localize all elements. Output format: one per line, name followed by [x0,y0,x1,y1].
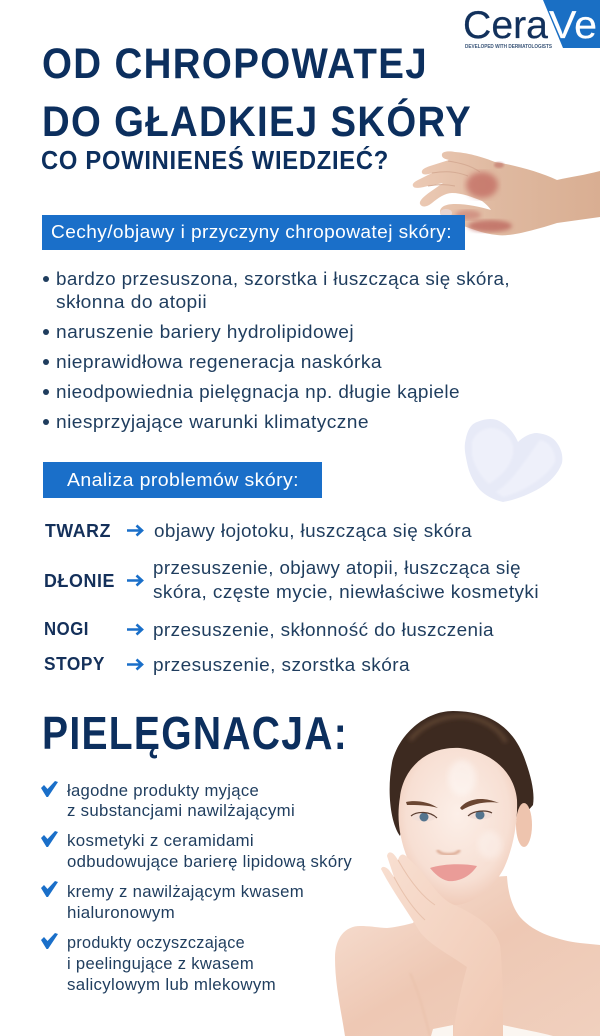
panel: skin analysis heading bar [43,462,322,498]
list: causes: nieprawidłowa regeneracja naskórka [56,351,382,372]
face [399,748,517,905]
row: nogi: NOGI [44,618,89,639]
logo: CeraVe: Cera [463,4,548,47]
row: stopy [44,653,410,675]
list: causes: skłonna do atopii [56,291,207,312]
towel [431,1025,553,1036]
hair [390,711,534,836]
list: care: produkty oczyszczające [67,934,245,952]
list: causes: naruszenie bariery hydrolipidowej [56,321,354,342]
photo: hand with irritated skin [413,151,600,235]
title [41,40,472,175]
photo: woman [335,711,600,1036]
panel: causes heading bar: Cechy/objawy i przyczyny chropowatej skóry: [51,221,452,242]
heading: pielęgnacja: PIELĘGNACJA: [42,707,348,759]
row: twarz: TWARZ [45,520,111,541]
list: care: kosmetyki z ceramidami [67,832,254,850]
title: DO GŁADKIEJ SKÓRY [42,97,472,146]
list: care: hialuronowym [67,904,175,922]
shoulders and neck [335,876,600,1036]
arrow [127,660,142,670]
list: care: z substancjami nawilżającymi [67,802,295,820]
panel: causes heading bar [42,215,465,250]
title: CO POWINIENEŚ WIEDZIEĆ? [41,145,389,175]
row: nogi: przesuszenie, skłonność do łuszczenia [153,619,494,640]
list: care: salicylowym lub mlekowym [67,976,276,994]
row: stopy: STOPY [44,653,105,674]
logo: CeraVe [463,0,600,50]
list: causes: bardzo przesuszona, szorstka i łuszcząca się skóra, [56,268,510,289]
list: causes [43,268,510,432]
arrow [127,624,142,634]
row: stopy: przesuszenie, szorstka skóra [153,654,410,675]
list: causes: nieodpowiednia pielęgnacja np. długie kąpiele [56,381,460,402]
cheek highlight [478,831,502,859]
row: dłonie: przesuszenie, objawy atopii, łuszcząca się [153,557,521,578]
lips [430,864,477,881]
list: care: i peelingujące z kwasem [67,955,254,973]
row: dłonie: DŁONIE [44,570,115,591]
list: care: odbudowujące barierę lipidową skóry [67,853,352,871]
arm crease [410,973,430,1036]
hand [381,852,503,1036]
list: care: kremy z nawilżającym kwasem [67,883,304,901]
eyes [412,812,436,822]
brows [406,799,499,810]
title: OD CHROPOWATEJ [42,40,428,88]
ear [516,803,532,847]
list: causes: niesprzyjające warunki klimatyczne [56,411,369,432]
icon: cream heart [465,419,562,502]
row: dłonie [44,557,539,602]
nose [437,850,460,854]
arrow [127,526,142,536]
row: twarz: objawy łojotoku, łuszcząca się skóra [154,520,472,541]
arrow [127,576,142,586]
list: care [41,781,352,994]
logo: CeraVe: Ve [549,4,597,47]
row: dłonie: skóra, częste mycie, niewłaściwe kosmetyki [153,581,539,602]
panel: skin analysis heading bar: Analiza problemów skóry: [67,469,299,490]
logo: CeraVe: DEVELOPED WITH DERMATOLOGISTS [465,44,552,50]
forehead highlight [448,760,476,796]
list: care: łagodne produkty myjące [67,782,259,800]
